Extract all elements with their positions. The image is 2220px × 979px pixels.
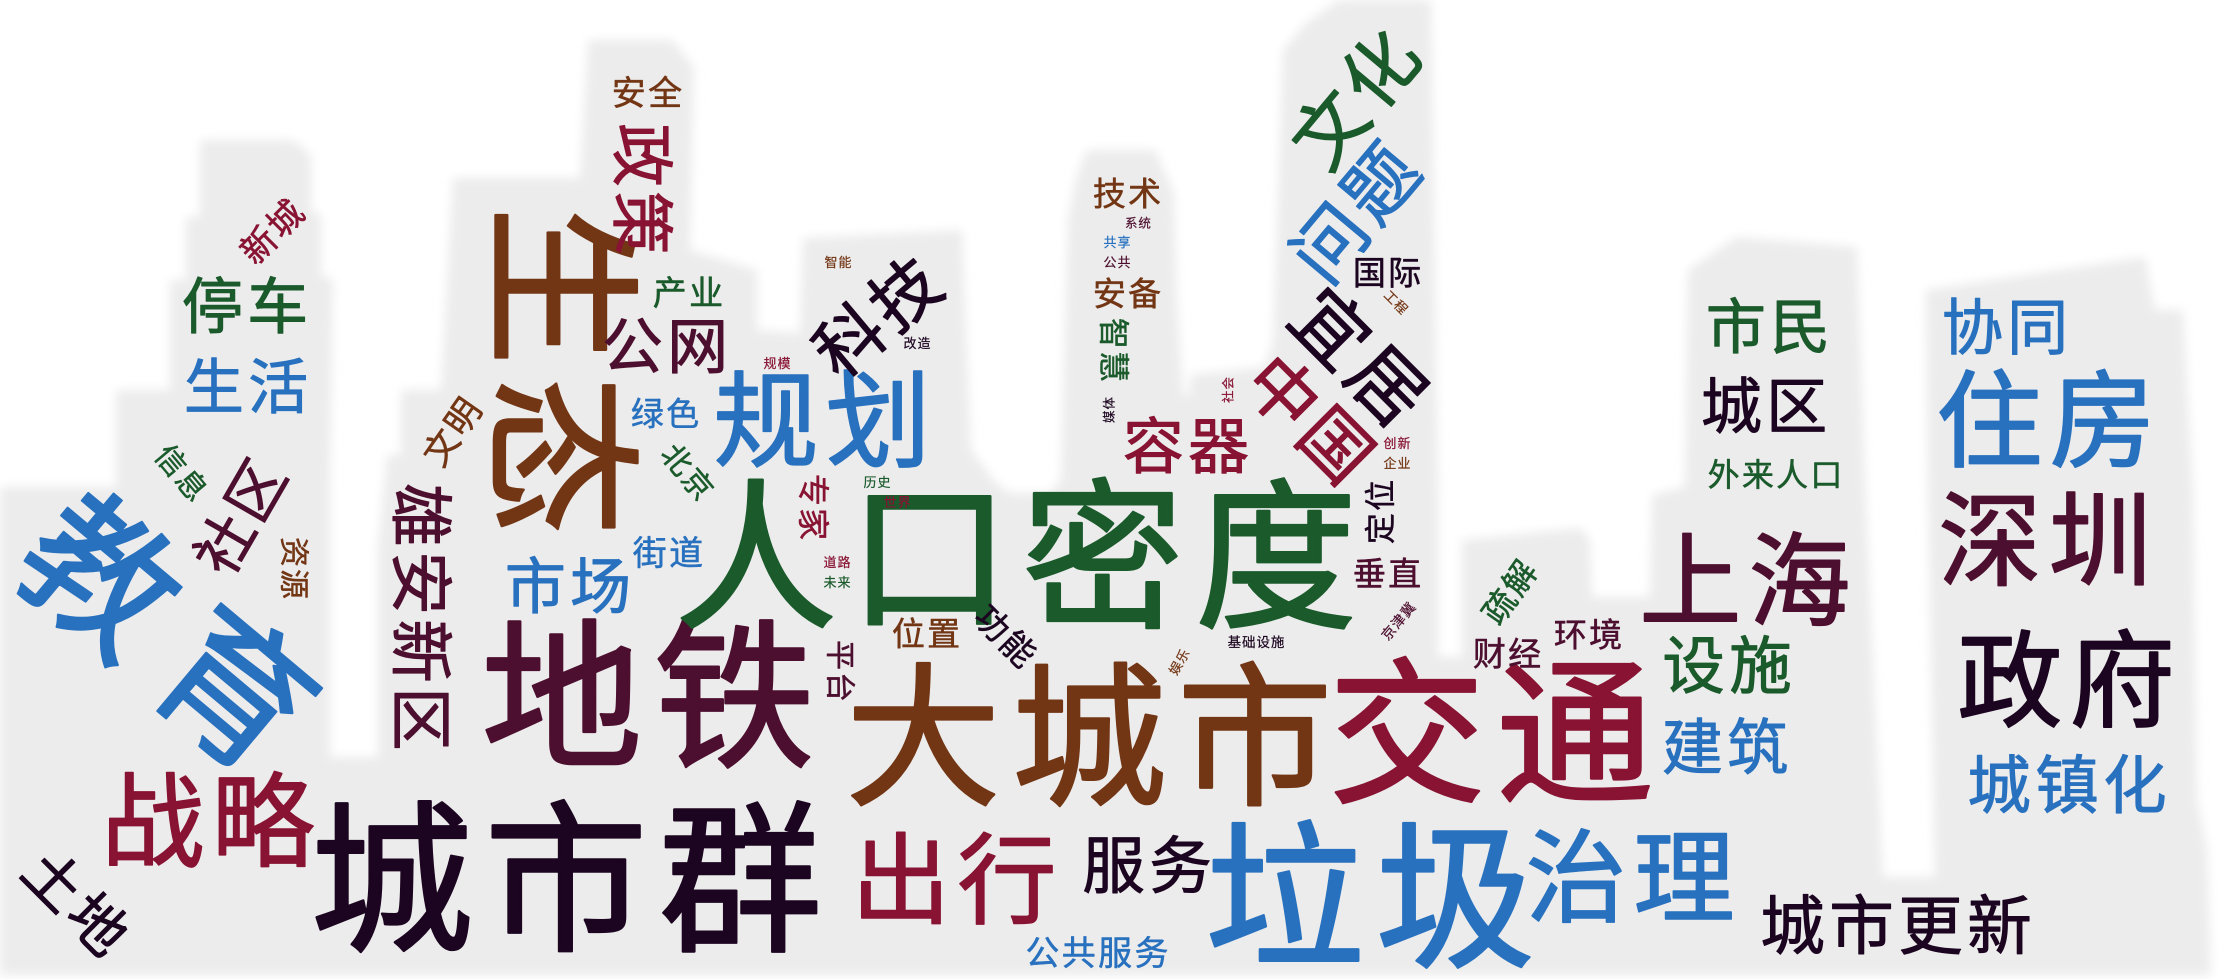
word: 绿色: 绿色 [631,395,701,432]
word: 道路: 道路 [824,555,851,570]
word: 企业: 企业 [1384,456,1411,471]
word: 环境: 环境 [1554,616,1624,653]
word: 历史: 历史 [864,475,891,490]
word: 生活: 生活 [184,354,312,421]
word: 改造: 改造 [904,336,931,351]
word: 设施: 设施 [1662,632,1796,702]
word: 共享: 共享 [1104,235,1131,250]
word: 生态: 生态 [469,206,647,547]
word: 智能: 智能 [825,255,852,270]
word: 媒体: 媒体 [1102,396,1116,423]
word: 世界: 世界 [884,495,911,510]
word: 城区: 城区 [1701,373,1831,441]
word: 城镇化: 城镇化 [1967,752,2171,822]
word: 资源: 资源 [277,537,310,601]
word: 市场: 市场 [505,553,635,621]
word: 文明: 文明 [416,390,491,473]
word: 城市更新: 城市更新 [1760,891,2036,963]
word: 信息: 信息 [148,439,214,510]
word: 政府: 政府 [1957,625,2182,742]
word: 街道: 街道 [633,535,706,573]
word: 国际: 国际 [1353,254,1423,291]
word: 京津冀: 京津冀 [1378,599,1419,643]
word: 功能: 功能 [966,598,1044,677]
word: 住房: 住房 [1936,364,2163,482]
word: 疏解: 疏解 [1475,552,1546,631]
word: 创新: 创新 [1384,436,1411,451]
word: 位置: 位置 [892,615,962,652]
word: 市民: 市民 [1706,294,1834,361]
word: 未来: 未来 [824,575,851,590]
word: 服务: 服务 [1082,832,1216,902]
word: 产业: 产业 [653,275,726,313]
word: 中国: 中国 [1230,341,1391,502]
word: 深圳: 深圳 [1938,485,2159,600]
word: 停车: 停车 [182,273,312,341]
word: 建筑: 建筑 [1662,714,1792,782]
word: 问题: 问题 [1277,127,1440,298]
word: 社会: 社会 [1220,376,1235,403]
word: 科技: 科技 [800,241,960,393]
word: 工程: 工程 [1381,287,1411,318]
word: 规模: 规模 [764,356,791,371]
word: 新城: 新城 [233,192,314,272]
word: 社区: 社区 [183,446,302,586]
word: 文化: 文化 [1277,13,1440,184]
word: 人口密度: 人口密度 [675,469,1368,650]
word: 宜居: 宜居 [1274,273,1447,446]
word: 大城市: 大城市 [846,653,1343,826]
word: 出行: 出行 [852,825,1063,936]
word: 北京: 北京 [654,438,720,509]
word: 公共服务: 公共服务 [1025,935,1171,973]
word: 治理: 治理 [1525,824,1742,936]
word: 外来人口: 外来人口 [1708,457,1845,493]
word: 容器: 容器 [1123,413,1253,481]
word: 政策: 政策 [605,123,675,259]
word: 交通: 交通 [1329,649,1664,824]
word: 系统: 系统 [1125,216,1152,230]
word: 智慧: 智慧 [1096,318,1131,384]
word: 雄安新区: 雄安新区 [384,483,454,755]
word: 上海: 上海 [1639,526,1858,640]
word: 规划: 规划 [713,365,938,482]
word: 土地: 土地 [9,838,143,972]
word: 安全: 安全 [612,75,685,113]
word: 安备: 安备 [1093,275,1163,312]
word: 娱乐: 娱乐 [1166,646,1193,678]
word: 财经: 财经 [1473,635,1543,672]
word: 技术: 技术 [1093,175,1163,212]
word: 垂直: 垂直 [1353,555,1423,592]
word: 定位: 定位 [1363,478,1398,544]
word: 城市群: 城市群 [310,790,833,973]
word: 公网: 公网 [602,313,732,381]
word: 公共: 公共 [1104,255,1131,270]
word: 平台: 平台 [823,640,856,704]
word: 战略: 战略 [101,766,322,881]
word: 地铁: 地铁 [481,610,826,790]
word: 专家: 专家 [795,474,831,542]
word: 协同: 协同 [1942,294,2072,362]
word: 基础设施: 基础设施 [1228,634,1285,650]
